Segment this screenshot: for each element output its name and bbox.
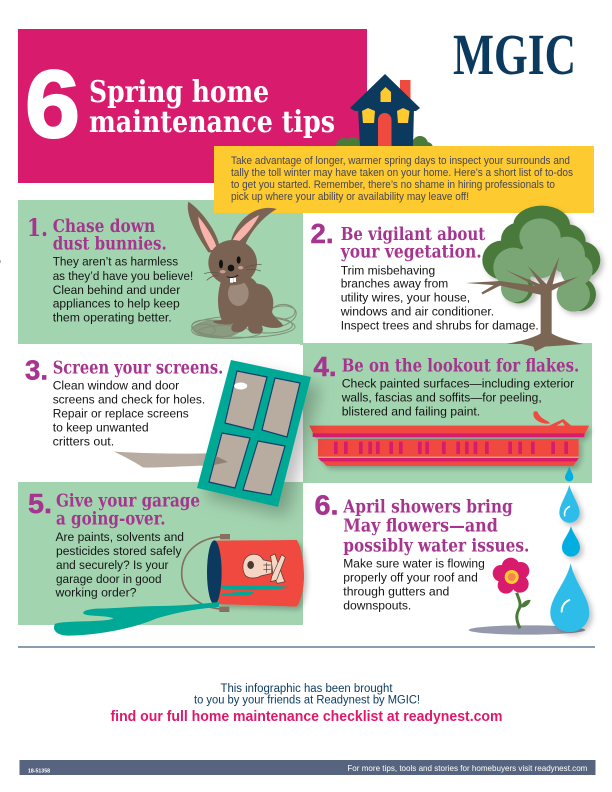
tip 6 body: Make sure water is flowing <box>343 557 485 571</box>
tip 2 number: 2. <box>310 218 334 249</box>
tip 3 heading: Screen your screens. <box>53 358 223 378</box>
icon: torn screen flap <box>114 452 225 468</box>
tip 1 heading: dust bunnies. <box>53 234 167 254</box>
tip 1 body: Clean behind and under <box>53 283 180 297</box>
tip 6 heading: possibly water issues. <box>343 537 529 557</box>
tip 6 body <box>343 557 485 613</box>
tip 1 heading <box>53 217 167 254</box>
tip 5 body: working order? <box>55 586 137 600</box>
title text: Spring home <box>89 74 269 109</box>
tip 2 body: branches away from <box>341 277 448 291</box>
tip 6 heading: May flowers—and <box>343 517 498 537</box>
footer bar <box>20 760 596 775</box>
tip 2 heading: Be vigilant about <box>341 225 485 245</box>
intro callout: to get you started. Remember, there’s no shame in hiring professionals to <box>231 179 555 191</box>
tip 2 heading: your vegetation. <box>340 243 482 263</box>
tip 2 body: Trim misbehaving <box>341 263 435 277</box>
tip 6 body: properly off your roof and <box>343 571 478 585</box>
tip 2 body <box>340 263 539 333</box>
tip 5 body: pesticides stored safely <box>56 544 182 558</box>
tip 3 body: Clean window and door <box>53 378 179 392</box>
icon: peeling gutter <box>309 411 589 481</box>
tip 1 body: They aren’t as harmless <box>53 255 178 269</box>
intro callout <box>214 146 594 213</box>
checklist call to action: find our full home maintenance checklist at readynest.com <box>110 708 502 725</box>
title text: maintenance tips <box>89 104 335 139</box>
tip 5 number: 5. <box>28 488 52 519</box>
intro callout: tally the toll winter may have taken on your home. Here’s a short list of to-dos <box>231 167 574 179</box>
panel: tip 4 <box>309 351 589 481</box>
tip 1 number: 1. <box>27 213 48 242</box>
tip 1 body: appliances to help keep <box>53 297 180 311</box>
icon: window with torn screen <box>197 360 311 507</box>
panel: tip 3 <box>25 354 311 507</box>
tip 2 heading <box>340 225 485 263</box>
tip 3 number: 3. <box>25 354 48 386</box>
skull and crossbones <box>243 554 285 583</box>
tip 6 body: through gutters and <box>343 585 449 599</box>
intro callout: Take advantage of longer, warmer spring days to inspect your surrounds and <box>231 155 570 167</box>
tip 2 body: windows and air conditioner. <box>340 305 494 319</box>
tip 3 body: Repair or replace screens <box>53 406 189 420</box>
tip 4 body <box>341 377 574 419</box>
panel: tip 5 <box>28 488 304 636</box>
tip 3 body: to keep unwanted <box>53 421 149 435</box>
panel: tip 6 <box>314 485 589 635</box>
sponsor message: This infographic has been brought <box>220 683 393 695</box>
tip 6 body: downspouts. <box>343 599 411 613</box>
tip 2 body: utility wires, your house, <box>341 291 470 305</box>
tip 4 body: Check painted surfaces—including exterior <box>342 377 574 391</box>
icon: spilled paint can <box>54 534 304 636</box>
tip 5 body: and securely? Is your <box>56 558 168 572</box>
icon: house <box>336 74 433 154</box>
tip 5 heading: Give your garage <box>56 492 200 512</box>
tip 1 body <box>53 255 193 325</box>
tip 5 heading <box>56 492 200 529</box>
tip 6 heading <box>342 497 529 557</box>
tip 5 body <box>55 530 184 600</box>
divider rule <box>18 646 595 648</box>
icon: tree <box>466 206 600 352</box>
tip 2 body: Inspect trees and shrubs for damage. <box>341 319 539 333</box>
tip 5 heading: a going-over. <box>56 509 166 529</box>
big number 6: 6 <box>25 51 80 158</box>
tip 6 heading: April showers bring <box>342 497 513 517</box>
job code: 18-51358 <box>28 768 50 774</box>
tip 3 body: screens and check for holes. <box>53 392 205 406</box>
tip 1 body: them operating better. <box>53 311 172 325</box>
tip 6 number: 6. <box>314 490 338 520</box>
sponsor message: to you by your friends at Readynest by MGIC! <box>194 694 420 706</box>
tip 5 body: garage door in good <box>56 572 162 586</box>
tip 3 body: critters out. <box>53 435 114 449</box>
tip 3 body <box>53 378 205 449</box>
sponsor message <box>194 683 420 706</box>
intro callout: pick up where your ability or availability may leave off! <box>231 191 469 203</box>
icon: rabbit on dust <box>188 202 299 339</box>
tip 5 body: Are paints, solvents and <box>56 530 184 544</box>
panel backgrounds <box>0 200 592 625</box>
icon: flower and water drops <box>469 485 589 635</box>
tip 1 heading: Chase down <box>53 217 155 237</box>
footer note: For more tips, tools and stories for homebuyers visit readynest.com <box>347 763 587 773</box>
tip 1 body: as they’d have you believe! <box>53 269 193 283</box>
title text <box>89 74 335 139</box>
tip 4 number: 4. <box>314 351 336 382</box>
panel: tip 1 <box>27 202 299 339</box>
panel: tip 2 <box>310 206 600 352</box>
tip 4 body: blistered and failing paint. <box>342 405 480 419</box>
title banner <box>18 29 367 183</box>
tip 4 body: walls, fascias and soffits—for peeling, <box>341 391 542 405</box>
